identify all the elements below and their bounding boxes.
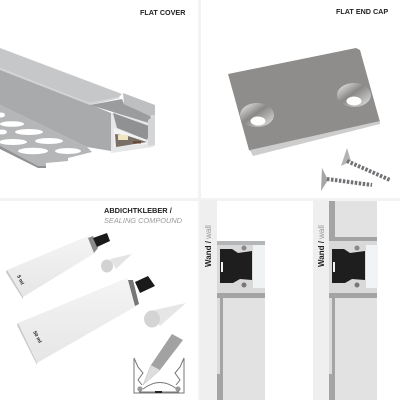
wall left — [200, 200, 217, 400]
tube 5 ml — [6, 233, 110, 299]
metal plate — [228, 48, 380, 152]
tube 50 ml: 50 ml — [31, 330, 43, 345]
panel: flat cover profile — [0, 48, 155, 168]
application diagram — [134, 334, 184, 393]
tube 50 ml — [17, 276, 155, 365]
cover top — [0, 48, 122, 103]
heading: sealing compound: SEALING COMPOUND — [104, 216, 183, 225]
wall right — [313, 200, 329, 400]
profile side wall — [0, 69, 111, 151]
profile section — [217, 241, 265, 298]
heading: sealing compound — [104, 206, 183, 225]
profile end face — [90, 93, 155, 153]
tube 5 ml: 5 ml — [15, 274, 25, 286]
heading: sealing compound: ABDICHTKLEBER / — [104, 206, 172, 215]
countersunk hole left — [240, 103, 274, 127]
wall label left: Wand / wall — [204, 225, 213, 267]
panel: wall section right — [313, 200, 378, 400]
heading: flat cover: FLAT COVER — [140, 8, 186, 17]
panel: flat end cap — [228, 48, 390, 191]
lower plaster — [335, 298, 377, 400]
panel: wall section left — [200, 200, 265, 400]
screws — [321, 148, 390, 191]
wall label right: Wand / wall — [317, 225, 326, 267]
profile section — [329, 241, 378, 298]
upper plaster — [335, 201, 377, 237]
heading: flat end cap: FLAT END CAP — [336, 7, 388, 16]
nozzle small — [101, 254, 132, 272]
countersunk hole right — [337, 83, 371, 107]
lower plaster — [223, 298, 265, 400]
nozzle large — [144, 303, 186, 328]
mesh flange — [0, 105, 92, 168]
